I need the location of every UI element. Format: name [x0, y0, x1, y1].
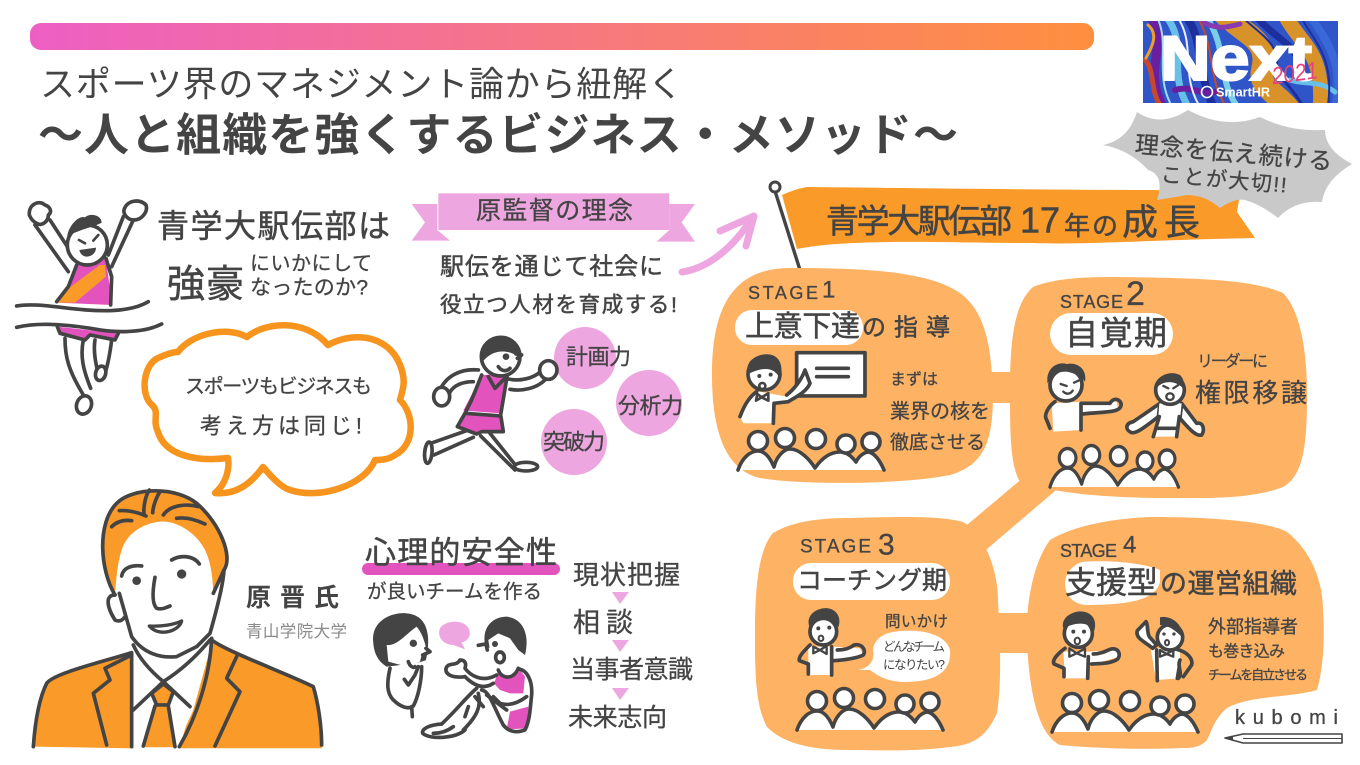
top gradient bar — [30, 23, 1094, 50]
name label — [246, 584, 347, 641]
banner: 17 years of growth: 17 — [1020, 200, 1060, 240]
burst callout: ことが大切!! — [1160, 164, 1288, 197]
burst callout: 理念を伝え続ける — [1134, 132, 1333, 176]
heading: psychological safety — [362, 536, 560, 603]
panel: stage 3: 問いかけ — [885, 614, 948, 630]
banner: 17 years of growth — [782, 187, 1255, 249]
panel: stage 2: 2 — [1126, 275, 1145, 313]
philosophy text — [440, 254, 677, 317]
icon: teacher with board — [740, 353, 865, 423]
banner: 17 years of growth: 青学大駅伝部 — [826, 202, 1012, 240]
panel: stage 4: 外部指導者 — [1208, 617, 1298, 637]
steps list with triangles: 相談 — [573, 608, 633, 638]
panel: stage 4: も巻き込み — [1208, 642, 1285, 660]
philosophy text: 役立つ人材を育成する! — [440, 293, 677, 317]
flag pole — [770, 182, 800, 270]
panel: stage 4 — [1027, 517, 1324, 749]
panel: stage 1 — [712, 268, 993, 483]
burst callout — [1103, 110, 1352, 218]
heading: how Aogaku became strong — [157, 208, 390, 306]
title: スポーツ界のマネジメント論から紐解く — [40, 66, 683, 104]
panel: stage 4: チームを自立させる — [1208, 668, 1308, 682]
panel: stage 3: になりたい? — [883, 658, 945, 672]
speech bubble: 考え方は同じ! — [200, 414, 362, 438]
panel: stage 1: 業界の核を — [890, 400, 990, 423]
stage connectors — [955, 372, 1062, 653]
philosophy text: 駅伝を通じて社会に — [440, 254, 663, 280]
heading: how Aogaku became strong: 強豪 — [167, 264, 244, 306]
banner: 17 years of growth: 成長 — [1122, 202, 1200, 242]
speech bubble — [145, 325, 411, 493]
panel: stage 3: STAGE — [800, 536, 871, 558]
heading: psychological safety: 心理的安全性 — [365, 536, 557, 570]
logo: Next 2021 SmartHR: SmartHR — [1216, 84, 1271, 100]
heading: psychological safety: が良いチームを作る — [367, 581, 542, 603]
portrait: Hara — [33, 490, 322, 748]
panel: stage 3: どんなチーム — [883, 640, 945, 654]
question bubble — [858, 631, 950, 682]
panel: stage 1: の指導 — [862, 314, 950, 342]
panel: stage 4: の運営組織 — [1160, 569, 1297, 599]
skill circles: 突破力 — [543, 430, 605, 454]
ribbon: coach's philosophy — [412, 193, 695, 242]
panel: stage 1: まずは — [890, 370, 938, 388]
logo: Next 2021 SmartHR: Next — [1160, 24, 1312, 94]
title: 〜人と組織を強くするビジネス・メソッド〜 — [38, 110, 958, 160]
icon: coach — [799, 608, 864, 675]
panel: stage 4: STAGE — [1060, 541, 1117, 561]
heading: how Aogaku became strong: なったのか? — [250, 276, 368, 300]
panel: stage 4: 4 — [1123, 532, 1136, 558]
icon: audience — [1052, 690, 1198, 732]
icon: runner at finish tape — [17, 201, 162, 416]
icon: audience — [797, 688, 943, 730]
panel: stage 2: リーダーに — [1197, 352, 1268, 370]
skill circles — [541, 327, 683, 475]
panel: stage 1: 徹底させる — [890, 432, 985, 454]
skill circles: 計画力 — [566, 344, 631, 370]
steps list with triangles: 現状把握 — [573, 560, 680, 590]
icon: coach and leader — [1046, 363, 1203, 437]
name label: 青山学院大学 — [246, 622, 347, 641]
icon: coach and leader — [1054, 611, 1192, 681]
panel: stage 3: 3 — [878, 528, 895, 562]
icon: running athlete — [424, 337, 557, 471]
icon: two people talking — [373, 613, 532, 737]
panel: stage 2: 権限移譲 — [1195, 378, 1307, 408]
icon: audience — [1050, 446, 1178, 487]
panel: stage 1: STAGE — [748, 283, 818, 303]
signature: kubomi with pencil: kubomi — [1235, 707, 1338, 729]
logo: Next 2021 SmartHR — [1143, 21, 1338, 103]
panel: stage 2: 自覚期 — [1065, 314, 1167, 352]
banner: 17 years of growth: 年の — [1064, 211, 1118, 241]
speech bubble: スポーツもビジネスも — [185, 375, 372, 398]
panel: stage 4: 支援型 — [1065, 566, 1158, 600]
panel: stage 2 — [1010, 275, 1307, 498]
panel: stage 1: 1 — [822, 276, 835, 304]
signature: kubomi with pencil — [1225, 707, 1342, 743]
steps list with triangles: 未来志向 — [568, 704, 667, 732]
steps list with triangles — [568, 560, 693, 732]
steps list with triangles: 当事者意識 — [570, 656, 693, 684]
heading: how Aogaku became strong: 青学大駅伝部は — [157, 208, 390, 244]
panel: stage 3 — [755, 517, 1000, 750]
arrow to growth banner — [682, 216, 754, 272]
icon: audience — [738, 428, 884, 470]
title — [38, 66, 958, 160]
logo: Next 2021 SmartHR: 2021 — [1269, 57, 1319, 90]
ribbon label: 原監督の理念 — [476, 197, 633, 225]
panel: stage 2: STAGE — [1060, 292, 1123, 312]
panel: stage 3: コーチング期 — [797, 567, 947, 595]
name label: 原晋氏 — [246, 584, 339, 612]
heading: how Aogaku became strong: にいかにして — [250, 253, 372, 275]
panel: stage 1: 上意下達 — [745, 310, 860, 343]
skill circles: 分析力 — [618, 394, 683, 418]
